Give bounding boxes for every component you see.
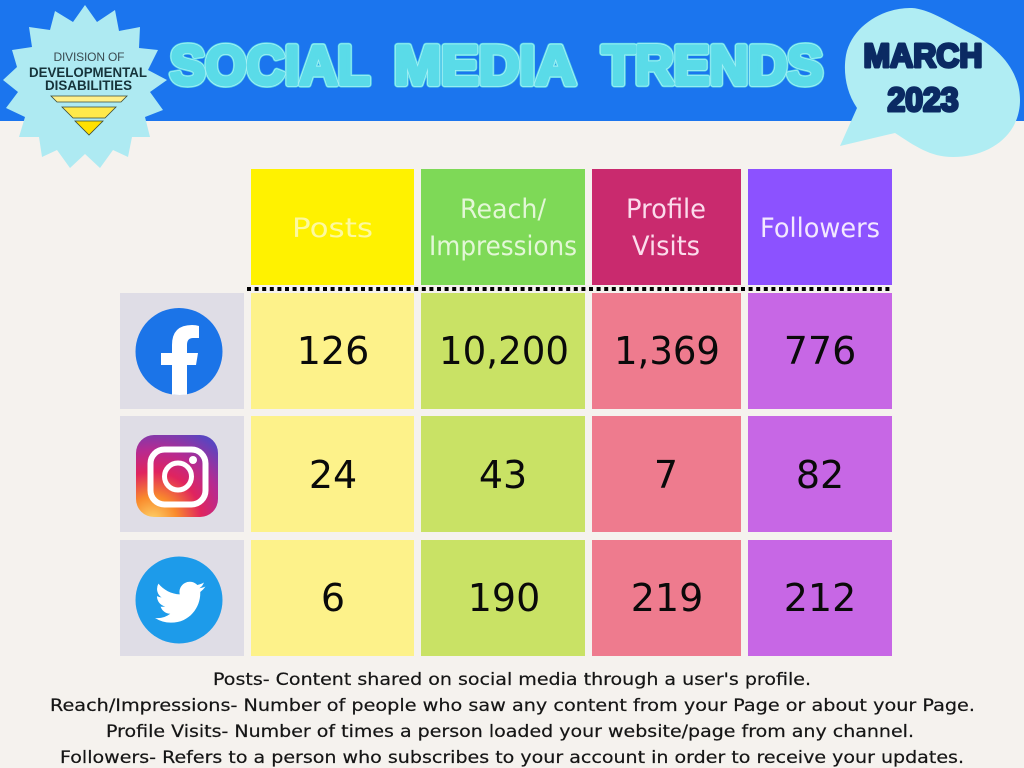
- title: TRENDS: [602, 34, 823, 96]
- row: twitter: [120, 540, 892, 656]
- logo text: DIVISION OF: [54, 50, 124, 64]
- title: SOCIAL: [170, 34, 370, 96]
- logo text: DISABILITIES: [45, 77, 132, 93]
- title: TRENDS: [602, 34, 823, 96]
- logo text: [29, 50, 147, 93]
- row: instagram: 82: [796, 453, 844, 497]
- speech bubble: 2023: [888, 81, 958, 118]
- definitions footnote: [50, 670, 975, 767]
- row: facebook: 776: [784, 329, 856, 373]
- column headers: [251, 169, 892, 285]
- row: facebook: 1,369: [614, 329, 720, 373]
- row: twitter: 219: [631, 576, 703, 620]
- speech bubble: [840, 8, 1020, 157]
- title: SOCIAL: [170, 34, 370, 96]
- icon: facebook: [136, 308, 222, 395]
- column headers: Profile: [626, 194, 706, 225]
- row: twitter: 212: [784, 576, 856, 620]
- definitions footnote: Posts- Content shared on social media through a user's profile.: [213, 670, 811, 689]
- title: MEDIA: [394, 34, 576, 96]
- definitions footnote: Profile Visits- Number of times a person loaded your website/page from any channel.: [106, 722, 914, 741]
- column headers: Visits: [632, 231, 700, 262]
- header banner: [0, 0, 1024, 121]
- column headers: Reach/: [460, 194, 547, 225]
- icon: instagram: [136, 435, 218, 517]
- row: facebook: 10,200: [439, 329, 569, 373]
- icon: twitter: [136, 556, 222, 644]
- logo triangle: [51, 96, 127, 135]
- column headers: Posts: [292, 213, 373, 244]
- definitions footnote: Followers- Refers to a person who subscribes to your account in order to receive your updates.: [60, 748, 964, 767]
- definitions footnote: Reach/Impressions- Number of people who saw any content from your Page or about your Page.: [50, 696, 975, 715]
- logo text: DEVELOPMENTAL: [29, 64, 147, 80]
- starburst: [3, 5, 167, 168]
- row: twitter: 6: [321, 576, 345, 620]
- dotted divider: [247, 287, 892, 291]
- row: instagram: [120, 416, 892, 532]
- month and year: MARCH: [864, 37, 982, 74]
- title: MEDIA: [394, 34, 576, 96]
- row: twitter: 190: [468, 576, 540, 620]
- title: MEDIA: [394, 34, 576, 96]
- column headers: Impressions: [429, 231, 577, 262]
- table: [120, 169, 892, 656]
- title: [170, 34, 823, 96]
- column headers: Followers: [760, 213, 880, 244]
- title: TRENDS: [602, 34, 823, 96]
- row: facebook: [120, 293, 892, 409]
- title: SOCIAL: [170, 34, 370, 96]
- row: facebook: 126: [297, 329, 369, 373]
- row: instagram: 24: [309, 453, 357, 497]
- logo badge: [3, 5, 167, 168]
- row: instagram: 7: [654, 453, 678, 497]
- row: instagram: 43: [479, 453, 527, 497]
